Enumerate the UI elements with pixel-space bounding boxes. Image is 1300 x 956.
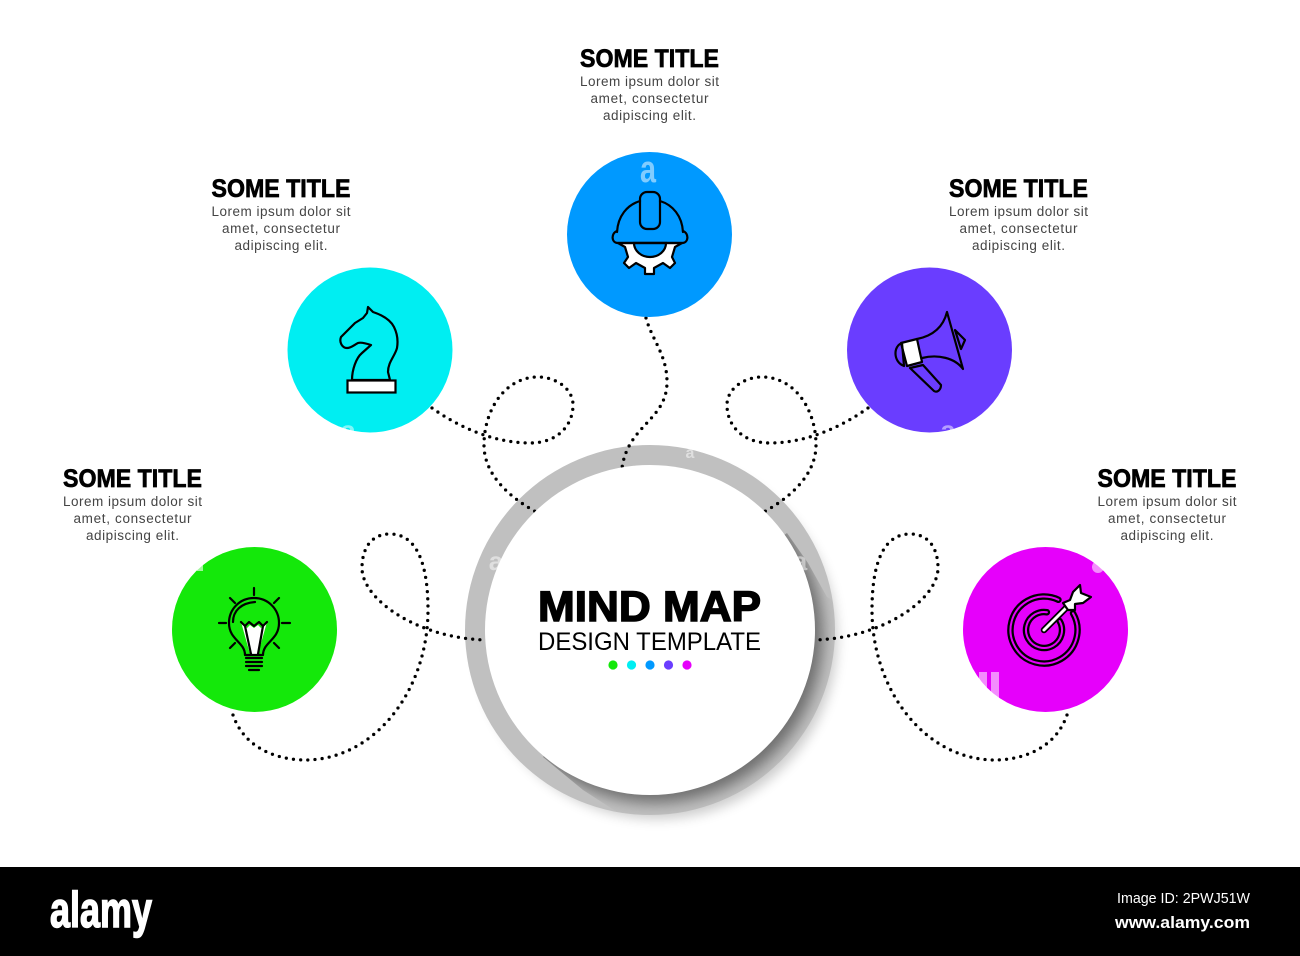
- heading: mind map: MIND MAP: [538, 583, 761, 631]
- watermark mark: a: [640, 149, 657, 191]
- footer bar: [0, 867, 1300, 956]
- text block: [63, 494, 202, 543]
- central hub ring with shadow: a: [489, 546, 504, 576]
- text block: Lorem ipsum dolor sit: [63, 494, 202, 509]
- panel: step 4 purple: [847, 175, 1088, 446]
- subheading: design template: DESIGN TEMPLATE: [538, 628, 761, 656]
- icon: target with arrow: [998, 584, 1091, 676]
- icon: megaphone: [895, 312, 965, 392]
- watermark marks: [979, 561, 1104, 706]
- text block: Lorem ipsum dolor sit: [1098, 494, 1237, 509]
- text block: adipiscing elit.: [234, 238, 328, 253]
- heading: SOME TITLE: [63, 465, 202, 493]
- purple circle: [847, 268, 1012, 432]
- dotted connectors: [233, 318, 1067, 760]
- text block: amet, consectetur: [960, 221, 1078, 236]
- central hub ring with shadow: a: [686, 445, 695, 462]
- panel: step 5 magenta: [963, 465, 1237, 712]
- text block: adipiscing elit.: [972, 238, 1065, 253]
- magenta circle: [963, 547, 1128, 712]
- cyan circle: [288, 268, 452, 432]
- central hub ring with shadow: a: [793, 546, 808, 576]
- panel: step 2 cyan: [212, 175, 452, 446]
- text block: adipiscing elit.: [86, 528, 179, 543]
- heading: SOME TITLE: [1098, 465, 1236, 493]
- text block: Lorem ipsum dolor sit: [949, 204, 1088, 219]
- text block: amet, consectetur: [590, 91, 709, 106]
- heading: SOME TITLE: [580, 45, 719, 73]
- text block: amet, consectetur: [74, 511, 192, 526]
- central white circle with title: [485, 465, 815, 795]
- text block: adipiscing elit.: [603, 108, 696, 123]
- website: www.alamy.com: [1114, 913, 1250, 932]
- image id: Image ID: 2PWJ51W: [1117, 890, 1251, 907]
- green circle: [172, 547, 337, 712]
- watermark mark: a: [940, 415, 956, 446]
- panel: step 1 green: [63, 465, 337, 712]
- icon: chess knight: [340, 307, 398, 392]
- icon: helmet and gear: [613, 192, 687, 274]
- text block: [212, 204, 351, 253]
- watermark mark: a: [340, 415, 356, 446]
- watermark marks: [197, 563, 203, 571]
- text block: [580, 74, 719, 123]
- text block: adipiscing elit.: [1120, 528, 1214, 543]
- panel: step 3 blue: [567, 45, 732, 317]
- central hub ring with shadow: [465, 445, 837, 819]
- heading: SOME TITLE: [212, 175, 350, 203]
- text block: Lorem ipsum dolor sit: [212, 204, 351, 219]
- blue circle: [567, 152, 732, 317]
- text block: amet, consectetur: [1108, 511, 1226, 526]
- icon: light bulb: [219, 588, 290, 670]
- text block: Lorem ipsum dolor sit: [580, 74, 719, 89]
- heading: SOME TITLE: [949, 175, 1088, 203]
- text block: [949, 204, 1088, 253]
- colour dots: [608, 660, 692, 670]
- logo: alamy: alamy: [50, 882, 152, 938]
- text block: amet, consectetur: [222, 221, 340, 236]
- text block: [1098, 494, 1237, 543]
